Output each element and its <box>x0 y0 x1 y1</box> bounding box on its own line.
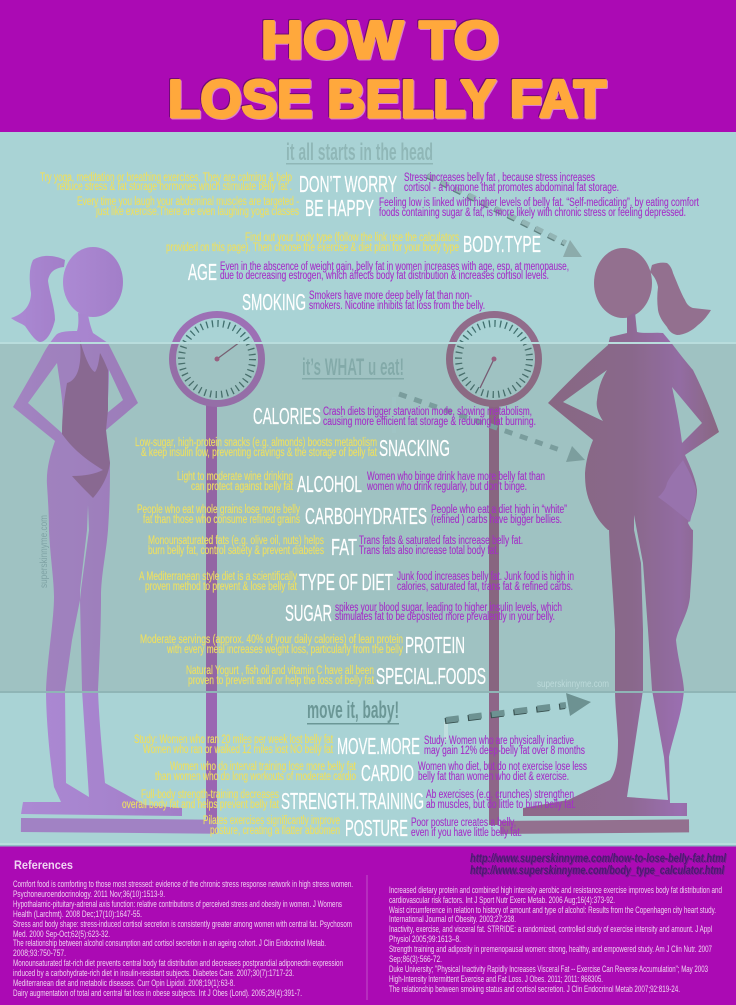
row: carbohydrates: (refined ) carbs have bigger bellies. <box>431 514 562 526</box>
row: move more: Study: Women who are physically inactive <box>424 735 574 747</box>
scale: left <box>21 314 262 834</box>
row: protein: Moderate servings (approx. 40% of your daily calories) of lean protein <box>140 634 403 646</box>
row: cardio: Women who diet, but do not exercise lose less <box>418 761 587 773</box>
figure: slim woman silhouette <box>11 247 182 816</box>
row: don't worry <box>40 171 619 197</box>
arrow: move upward <box>445 693 591 740</box>
row: fat: Monounsaturated fats (e.g. olive oil, nuts) helps <box>148 535 324 547</box>
row: cardio: Women who do interval training lose more belly fat <box>170 761 357 773</box>
row: calories: CALORIES <box>253 403 321 429</box>
section heading: move it, baby! <box>307 697 399 724</box>
row: special foods: SPECIAL.FOODS <box>376 663 486 689</box>
row: don't worry: Try yoga, meditation or breathing exercises. They are calming & help <box>40 172 292 184</box>
row: cardio: than women who do long workouts of moderate cardio <box>155 771 356 783</box>
references: left column: 2008;93:750-757. <box>13 948 66 959</box>
row: sugar <box>285 600 562 626</box>
row: alcohol: Women who binge drink have more belly fat than <box>367 471 545 483</box>
row: smoking: smokers. Nicotine inhibits fat loss from the belly. <box>309 300 485 312</box>
row: type of diet: A Mediterranean style diet is a scientifically <box>139 571 297 583</box>
row: be happy: just like exercise.There are even laughing yoga classes <box>95 206 299 218</box>
arrow: calories to belly <box>394 394 585 462</box>
row: special foods <box>186 663 486 689</box>
middle band <box>0 344 736 692</box>
references: left column: induced by a carbohydrate-rich diet in insulin-resistant subjects. Diabetes Care. 2007;30(7):1717-23. <box>13 968 294 979</box>
row: be happy: Every time you laugh your abdominal muscles are targeted - <box>77 196 299 208</box>
row: smoking: SMOKING <box>242 289 306 315</box>
teal background <box>0 132 736 847</box>
row: don't worry: Stress increases belly fat , because stress increases <box>404 172 595 184</box>
references: left column: Stress and body shape: stress-induced cortisol secretion is consistently greater among women with central fat. Psychosom <box>13 919 352 930</box>
references: left column: Monounsaturated fat-rich diet prevents central body fat distribution and decreases postprandial adiponectin expression <box>13 958 343 969</box>
row: calories: causing more efficient fat storage & reducing fat burning. <box>323 416 536 428</box>
title: HOW TO <box>261 11 499 70</box>
row: protein: PROTEIN <box>405 632 465 658</box>
row: fat: burn belly fat, control satiety & prevent diabetes <box>148 545 324 557</box>
swimsuit shading <box>62 340 110 498</box>
row: type of diet: calories, saturated fat, trans fat & refined carbs. <box>397 581 573 593</box>
row: age <box>188 259 569 285</box>
row: strength training: STRENGTH.TRAINING <box>281 788 424 814</box>
row: carbohydrates: People who eat whole grains lose more belly <box>137 504 300 516</box>
row: body type: provided on this page). Then choose the exercise & diet plan for your body type <box>166 242 459 254</box>
row: snacking: & keep insulin low, preventing cravings & the storage of belly fat <box>141 447 378 459</box>
section heading <box>307 697 399 724</box>
references: left column: Hypothalamic-pituitary-adrenal axis function: relative contributions of perceived stress and obesity in women. J Womens <box>13 899 342 910</box>
references: right column: Sep;86(3):566-72. <box>389 954 442 965</box>
row: move more: may gain 12% deep-belly fat over 8 months <box>424 745 585 757</box>
row: posture: POSTURE <box>345 815 408 841</box>
section: it's what u eat <box>135 354 574 689</box>
row: cardio <box>155 760 587 786</box>
row: body type <box>166 231 541 257</box>
row: posture: posture, creating a flatter abdomen <box>210 825 340 837</box>
references heading: References <box>14 858 73 872</box>
watermark: right: superskinnyme.com <box>537 679 609 690</box>
references: left column <box>13 879 353 999</box>
row: be happy: BE HAPPY <box>305 195 374 221</box>
row: snacking: Low-sugar, high-protein snacks (e.g. almonds) boosts metabolism <box>135 437 377 449</box>
row: special foods: Natural Yogurt , fish oil and vitamin C have all been <box>186 665 374 677</box>
row: move more: Study: Women who ran 20 miles per week lost belly fat <box>134 734 334 746</box>
references: left column: Med. 2000 Sep-Oct;62(5):623-32. <box>13 929 110 940</box>
row: fat: Trans fats also increase total body fat. <box>359 545 499 557</box>
row: age: AGE <box>188 259 217 285</box>
row: snacking <box>135 435 450 461</box>
references: right column: High-Intensity Intermittent Exercise and Fat Loss. J Obes. 2011; 2011: 868305. <box>389 974 603 985</box>
row: alcohol: can protect against belly fat <box>191 481 294 493</box>
scale: right <box>450 314 689 834</box>
row: smoking <box>242 289 485 315</box>
row: sugar: spikes your blood sugar, leading to higher insulin levels, which <box>335 602 562 614</box>
references: left column: Health (Larchmt). 2008 Dec;17(10):1647-55. <box>13 909 142 920</box>
row: be happy <box>77 195 700 221</box>
watermark: vertical: superskinnyme.com <box>39 515 50 588</box>
row: calories: Crash diets trigger starvation mode, slowing metabolism, <box>323 406 532 418</box>
row: special foods: proven to prevent and/ or help the loss of belly fat <box>188 675 375 687</box>
row: age: due to decreasing estrogen, which affects body fat distribution & increases cortisol levels. <box>220 270 549 282</box>
row: fat <box>148 534 523 560</box>
references: left column: The relationship between alcohol consumption and cortisol secretion in an ageing cohort. J Clin Endocrinol Metab. <box>13 938 326 949</box>
row: sugar: SUGAR <box>285 600 332 626</box>
figure: overweight woman silhouette <box>523 248 719 816</box>
row: protein <box>140 632 465 658</box>
row: don't worry: cortisol - a hormone that promotes abdominal fat storage. <box>404 182 619 194</box>
row: body type: BODY.TYPE <box>463 231 541 257</box>
row: move more: MOVE.MORE <box>337 733 420 759</box>
section heading: it all starts in the head <box>286 139 433 166</box>
references: right column: cardiovascular risk factors. Int J Sport Nutr Exerc Metab. 2006 Aug;16(4):373-92. <box>389 895 615 906</box>
row: don't worry: reduce stress & fat storage hormones which stimulate belly fat . <box>57 181 292 193</box>
section heading: it’s WHAT u eat! <box>302 354 404 381</box>
row: don't worry: DON’T WORRY <box>299 171 397 197</box>
row: snacking: SNACKING <box>379 435 450 461</box>
row: strength training: overall body fat and helps prevent belly fat <box>122 799 280 811</box>
row: posture: Poor posture creates a belly, <box>411 817 516 829</box>
section: it all starts in the head <box>40 139 700 315</box>
row: type of diet: TYPE OF DIET <box>299 569 393 595</box>
row: posture <box>203 815 522 841</box>
row: strength training: ab muscles, but do little to burn belly fat. <box>426 799 576 811</box>
header band <box>0 0 736 132</box>
title <box>168 11 606 129</box>
arrow: worry to body <box>427 175 582 257</box>
section heading <box>302 354 404 381</box>
row: fat: Trans fats & saturated fats increase belly fat. <box>359 535 523 547</box>
references: right column: International Journal of Obesity. 2003;27:238. <box>389 914 516 925</box>
row: carbohydrates: CARBOHYDRATES <box>305 503 427 529</box>
row: smoking: Smokers have more deep belly fat than non- <box>309 290 472 302</box>
row: alcohol <box>177 471 545 497</box>
row: posture: Pilates exercises significantly improve <box>203 815 340 827</box>
row: age: Even in the abscence of weight gain, belly fat in women increases with age, esp. at menopause, <box>220 261 569 273</box>
row: sugar: stimulates fat to be deposited more prevalently in your belly. <box>335 611 555 623</box>
belly highlight <box>658 460 696 522</box>
references: left column: Psychoneuroendocrinology. 2011 Nov;36(10):1513-9. <box>13 889 165 900</box>
references: left column: Dairy augmentation of total and central fat loss in obese subjects. Int J Obes (Lond). 2005;29(4):391-7. <box>13 988 302 999</box>
row: type of diet <box>139 569 574 595</box>
references: left column: Mediterranean diet and metabolic diseases. Curr Opin Lipidol. 2008;19(1):63-8. <box>13 978 235 989</box>
title: LOSE BELLY FAT <box>168 70 606 129</box>
section: move it, baby <box>122 697 587 841</box>
row: strength training: Ab exercises (e.g. crunches) strengthen <box>426 789 574 801</box>
reference links <box>470 853 727 877</box>
row: strength training: Full-body strength-training decreases <box>141 789 279 801</box>
row: alcohol: ALCOHOL <box>297 471 362 497</box>
panel: references footer <box>0 845 736 1005</box>
row: alcohol: women who drink regularly, but don’t binge. <box>366 481 527 493</box>
references: right column: Physiol 2005;99:1613–8. <box>389 934 461 945</box>
row: fat: FAT <box>331 534 357 560</box>
references: left column: Comfort food is comforting to those most stressed: evidence of the chronic stress response network in high stress women. <box>13 879 353 890</box>
row: body type: Find out your body type (follow the link use the calculators <box>245 232 459 244</box>
row: protein: with every meal increases weight loss, particularly from the belly <box>166 644 403 656</box>
row: carbohydrates <box>137 503 567 529</box>
row: carbohydrates: People who eat a diet high in “white” <box>431 504 567 516</box>
row: type of diet: Junk food increases belly fat. Junk food is high in <box>397 571 574 583</box>
row: cardio: belly fat than women who diet & exercise. <box>418 771 569 783</box>
row: strength training <box>122 788 576 814</box>
row: type of diet: proven method to prevent & lose belly fat <box>145 581 298 593</box>
row: carbohydrates: fat than those who consume refined grains <box>143 514 300 526</box>
row: move more: Women who ran or walked 12 miles lost NO belly fat <box>143 744 334 756</box>
references: right column <box>389 885 722 995</box>
row: alcohol: Light to moderate wine drinking <box>177 471 293 483</box>
row: posture: even if you have little belly fat. <box>411 827 522 839</box>
row: cardio: CARDIO <box>361 760 414 786</box>
row: move more <box>134 733 585 759</box>
row: calories <box>253 403 536 429</box>
